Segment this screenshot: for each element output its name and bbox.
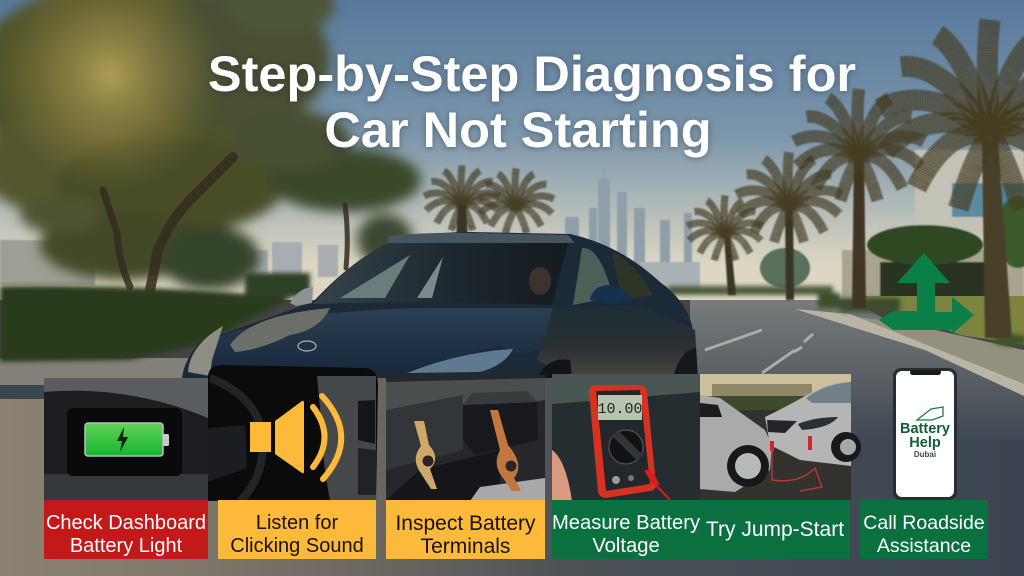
label: measure voltage: Voltage (592, 535, 660, 557)
icon: phone with Battery Help Dubai logo: Battery (900, 421, 950, 437)
grass and sidewalk (795, 296, 1024, 396)
label: jump-start: Try Jump-Start (706, 518, 844, 541)
panel: battery terminals photo (386, 375, 545, 501)
panel: dashboard battery photo (44, 378, 208, 501)
icon: green battery (85, 423, 169, 456)
label: call roadside: Call Roadside (863, 512, 985, 534)
label: inspect terminals: Terminals (421, 535, 510, 558)
label: check dashboard: Battery Light (70, 535, 182, 557)
label: measure voltage (552, 500, 700, 559)
title: Car Not Starting (324, 101, 712, 158)
label: listen for clicking: Listen for (256, 512, 338, 534)
title: Step-by-Step Diagnosis for (208, 45, 856, 102)
icon: phone with Battery Help Dubai logo: Dubai (914, 450, 936, 459)
label: call roadside (860, 500, 988, 559)
left trees (0, 0, 421, 360)
label: check dashboard (44, 500, 208, 559)
far road (690, 300, 1024, 440)
palm trees (424, 20, 1024, 338)
label: inspect terminals: Inspect Battery (395, 512, 536, 535)
icon: green directional arrows (879, 253, 974, 334)
panel: jump-start photo (700, 374, 861, 501)
label: call roadside: Assistance (877, 535, 971, 557)
road markings (705, 330, 813, 373)
ground (0, 358, 1024, 576)
icon: multimeter (589, 385, 670, 500)
car (182, 232, 698, 378)
icon: multimeter: 10.00 (597, 401, 643, 418)
icon: phone with Battery Help Dubai logo: Help (909, 435, 941, 451)
icon: phone with Battery Help Dubai logo (893, 368, 957, 500)
label: listen for clicking: Clicking Sound (230, 535, 364, 557)
hedges (0, 273, 1024, 362)
terminal left (414, 421, 437, 489)
panel: multimeter photo (552, 374, 700, 501)
label: jump-start (700, 500, 850, 559)
label: listen for clicking (218, 500, 376, 559)
distant skyline (0, 162, 700, 292)
right buildings (760, 150, 1024, 302)
label: check dashboard: Check Dashboard (46, 512, 206, 534)
label: measure voltage: Measure Battery (552, 512, 700, 534)
panel images (44, 365, 957, 501)
label: inspect terminals (386, 500, 545, 559)
title (208, 45, 858, 162)
panel: steering wheel photo with speaker (208, 365, 378, 501)
sky (0, 0, 1024, 300)
icon: speaker (250, 396, 341, 479)
terminal right (490, 410, 521, 491)
left pavement and road edge (0, 358, 190, 399)
